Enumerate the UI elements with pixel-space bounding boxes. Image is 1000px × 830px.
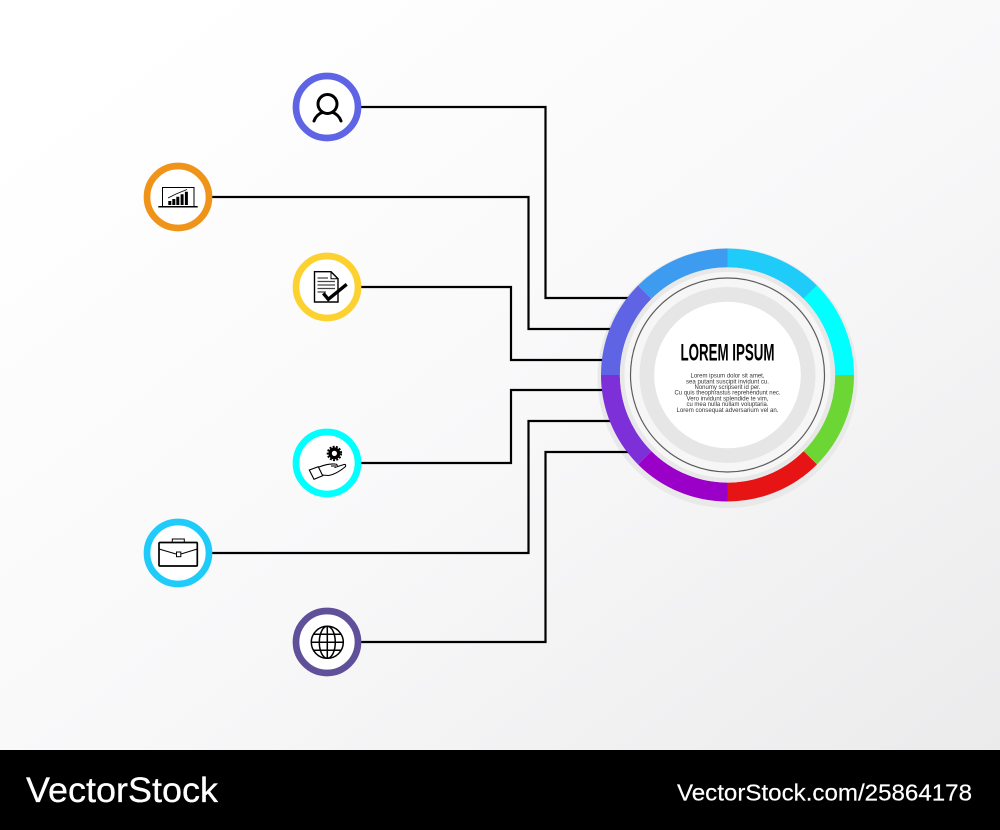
connector lines [212, 107, 635, 642]
icon: briefcase [159, 539, 197, 566]
icon: person [314, 94, 341, 121]
node: document check [296, 256, 358, 318]
node: person [296, 76, 358, 138]
segment: right lower [804, 375, 854, 464]
footer logo: VectorStock [26, 770, 218, 810]
centre body text: sea putant suscipit invidunt cu. [686, 379, 769, 385]
thin outline ring [630, 278, 824, 472]
centre body text: Nonumy scripserit id per. [694, 385, 761, 391]
icon: globe [311, 626, 343, 658]
segment: bottom right [728, 451, 817, 502]
footer url: VectorStock.com/25864178 [677, 780, 972, 806]
icon: laptop chart [158, 188, 198, 207]
icon: document with check [314, 272, 347, 302]
footer bar [0, 750, 1000, 830]
inner light disc [624, 272, 830, 478]
central ring diagram [601, 248, 854, 502]
segment: top left [638, 248, 728, 299]
centre body text [674, 374, 781, 414]
segment: left upper [601, 286, 651, 375]
centre body text: cu mea nulla nullam voluptaria. [686, 402, 769, 408]
icon: hand and gear [309, 447, 346, 479]
node: chart on laptop [147, 166, 209, 228]
segment: right upper [804, 286, 854, 375]
node: globe [296, 611, 358, 673]
centre body text: Lorem ipsum dolor sit amet, [690, 374, 765, 380]
grey centre band [640, 287, 816, 463]
white centre [654, 302, 801, 448]
inner grey band [620, 267, 835, 483]
ring shadow [598, 248, 858, 508]
node: hand with gear [296, 432, 358, 494]
centre title: LOREM IPSUM [680, 340, 774, 366]
node: briefcase [147, 522, 209, 584]
segment: bottom left [638, 451, 728, 502]
segment: left lower [601, 375, 651, 464]
centre body text: Cu quis theophrastus reprehendunt nec. [674, 391, 781, 397]
segment: top right [728, 248, 817, 299]
centre body text: Vero invidunt splendide te vim, [686, 396, 769, 402]
centre body text: Lorem consequat adversarium vel an. [676, 408, 779, 414]
